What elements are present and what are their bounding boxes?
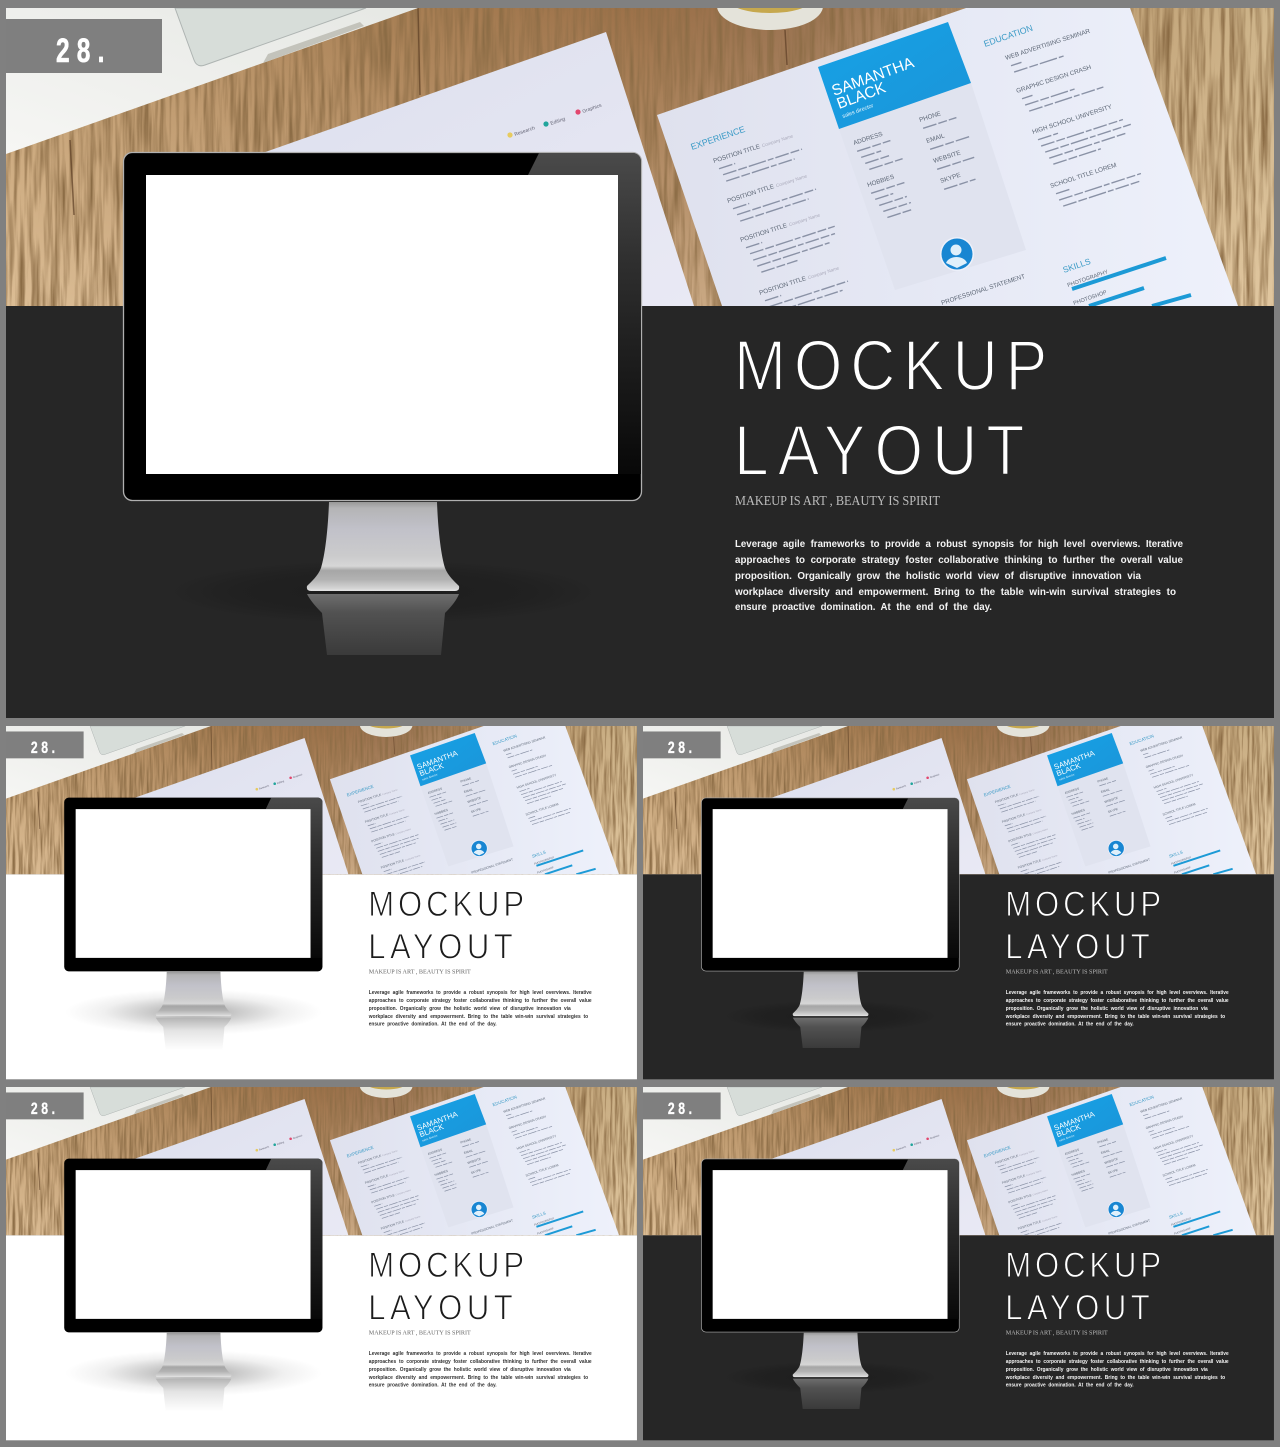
monitor reflection <box>307 594 459 655</box>
name banner: SAMANTHA <box>830 54 917 100</box>
body text: ensure proactive domination. At the end of the day. <box>1006 1383 1134 1389</box>
body text: approaches to corporate strategy foster collaborative thinking to further the overall value <box>369 998 592 1004</box>
name banner: sales director <box>842 103 875 120</box>
monitor reflection <box>793 1379 868 1409</box>
monitor reflection <box>156 1379 231 1411</box>
center column <box>839 83 1026 290</box>
body text: proposition. Organically grow the holistic world view of disruptive innovation via <box>1006 1006 1208 1012</box>
contact column: PHONE <box>918 110 942 124</box>
education column: GRAPHIC DESIGN CRASH <box>1015 64 1093 95</box>
title: MOCKUP <box>734 326 1047 406</box>
body text: Leverage agile frameworks to provide a robust synopsis for high level overviews. Iterative <box>369 1351 592 1357</box>
title: LAYOUT <box>368 928 513 967</box>
badge: slide number <box>643 1092 721 1119</box>
education column: SCHOOL TITLE LOREM <box>1049 162 1118 190</box>
experience column: Company Name <box>807 265 840 280</box>
panel: small light slide, bottom left <box>6 1074 637 1440</box>
skills bars <box>1061 256 1191 307</box>
badge: slide number: 28. <box>56 32 112 70</box>
laptop <box>6 8 418 154</box>
dark lower background <box>643 1235 1274 1440</box>
body text <box>368 1351 592 1389</box>
experience column: Company Name <box>775 173 808 188</box>
panel: large dark slide <box>6 0 1274 718</box>
monitor frame and screen <box>124 152 642 500</box>
contact column: HOBBIES <box>866 174 895 189</box>
back sheet of paper with legend: Graphics <box>582 103 603 115</box>
body text <box>734 538 1183 613</box>
body text <box>1005 1351 1229 1389</box>
body text: proposition. Organically grow the holistic world view of disruptive innovation via <box>369 1006 571 1012</box>
experience column: POSITION TITLE <box>758 275 807 297</box>
monitor stand <box>793 972 868 1016</box>
body text: ensure proactive domination. At the end of the day. <box>1006 1022 1134 1028</box>
body text: ensure proactive domination. At the end of the day. <box>369 1022 497 1028</box>
title <box>734 326 1047 491</box>
name banner <box>818 22 971 129</box>
badge: slide number <box>6 19 162 73</box>
badge: slide number <box>6 731 84 758</box>
education column: WEB ADVERTISING SEMINAR <box>1004 28 1091 62</box>
body text: approaches to corporate strategy foster collaborative thinking to further the overall value <box>369 1359 592 1365</box>
body text <box>1005 990 1229 1028</box>
monitor stand <box>307 502 459 591</box>
body text: workplace diversity and empowerment. Bring to the table win-win survival strategies to <box>734 586 1176 598</box>
body text <box>368 990 592 1028</box>
contact column: SKYPE <box>939 172 962 185</box>
body text: ensure proactive domination. At the end of the day. <box>369 1383 497 1389</box>
education column: EDUCATION <box>982 23 1034 49</box>
subtitle: MAKEUP IS ART , BEAUTY IS SPIRIT <box>369 1329 471 1336</box>
body text: ensure proactive domination. At the end of the day. <box>735 601 992 613</box>
photo: desk with laptop, coffee and resume <box>6 0 1274 315</box>
experience column: Company Name <box>761 133 794 148</box>
title: LAYOUT <box>734 411 1024 491</box>
body text: proposition. Organically grow the holistic world view of disruptive innovation via <box>735 570 1141 582</box>
experience column: Company Name <box>788 212 821 227</box>
title: MOCKUP <box>1005 1246 1161 1286</box>
photo: desk <box>643 713 1274 879</box>
monitor floor shadow <box>65 1350 322 1396</box>
title: MOCKUP <box>368 1246 524 1286</box>
monitor floor shadow <box>168 560 598 624</box>
back sheet of paper with legend <box>200 32 694 306</box>
body text: workplace diversity and empowerment. Bring to the table win-win survival strategies to <box>1005 1014 1225 1020</box>
title: LAYOUT <box>368 1289 513 1328</box>
photo: desk <box>6 1074 637 1240</box>
white lower background <box>6 874 637 1079</box>
title <box>1005 1246 1161 1328</box>
title: MOCKUP <box>1005 885 1161 925</box>
experience column <box>689 124 850 315</box>
monitor mockup <box>701 798 959 1048</box>
body text: Leverage agile frameworks to provide a robust synopsis for high level overviews. Iterative <box>735 538 1183 550</box>
body text: approaches to corporate strategy foster collaborative thinking to further the overall value <box>1006 1359 1229 1365</box>
resume sheet <box>657 8 1238 315</box>
profile statement: PROFESSIONAL STATEMENT <box>940 273 1026 307</box>
body text: Leverage agile frameworks to provide a robust synopsis for high level overviews. Iterative <box>1006 1351 1229 1357</box>
panel: small light slide, top left <box>6 713 637 1079</box>
contact column: ADDRESS <box>852 131 884 147</box>
experience column: POSITION TITLE <box>726 183 775 205</box>
dark lower background <box>6 306 1274 718</box>
body text: Leverage agile frameworks to provide a robust synopsis for high level overviews. Iterative <box>369 990 592 996</box>
subtitle: MAKEUP IS ART , BEAUTY IS SPIRIT <box>735 493 941 508</box>
body text: proposition. Organically grow the holistic world view of disruptive innovation via <box>369 1367 571 1373</box>
wooden desk <box>6 8 1274 306</box>
skills bars: SKILLS <box>1061 256 1092 275</box>
experience column: POSITION TITLE <box>739 222 788 244</box>
skills bars: PHOTOSHOP <box>1073 290 1108 307</box>
experience column: EXPERIENCE <box>689 124 746 152</box>
contact column: WEBSITE <box>932 149 962 165</box>
subtitle: MAKEUP IS ART , BEAUTY IS SPIRIT <box>1006 968 1108 975</box>
monitor floor shadow <box>724 1001 938 1033</box>
monitor mockup <box>64 1159 322 1411</box>
education column <box>982 23 1143 208</box>
body text: approaches to corporate strategy foster collaborative thinking to further the overall value <box>1006 998 1229 1004</box>
monitor stand <box>156 1333 231 1377</box>
monitor stand <box>156 972 231 1016</box>
title: LAYOUT <box>1005 1289 1150 1328</box>
badge: slide number <box>643 731 721 758</box>
skills bars: PHOTOGRAPHY <box>1067 269 1109 289</box>
panel: small dark slide, bottom right <box>643 1074 1274 1440</box>
title: LAYOUT <box>1005 928 1150 967</box>
body text: workplace diversity and empowerment. Bring to the table win-win survival strategies to <box>368 1014 588 1020</box>
back sheet of paper with legend: Editing <box>550 116 566 127</box>
white lower background <box>6 1235 637 1440</box>
monitor reflection <box>156 1018 231 1050</box>
education column: HIGH SCHOOL UNIVERSITY <box>1031 103 1114 136</box>
monitor mockup <box>701 1159 959 1409</box>
dark lower background <box>643 874 1274 1079</box>
subtitle: MAKEUP IS ART , BEAUTY IS SPIRIT <box>369 968 471 975</box>
coffee cup <box>717 0 823 30</box>
body text: workplace diversity and empowerment. Bring to the table win-win survival strategies to <box>1005 1375 1225 1381</box>
title <box>368 1246 524 1328</box>
title <box>1005 885 1161 967</box>
back sheet of paper with legend: Research <box>514 125 536 138</box>
contact column: EMAIL <box>925 132 946 145</box>
avatar icon <box>940 237 974 271</box>
monitor frame and screen <box>64 798 322 971</box>
monitor stand <box>793 1333 868 1377</box>
photo: desk <box>6 713 637 879</box>
monitor floor shadow <box>724 1362 938 1394</box>
body text: proposition. Organically grow the holistic world view of disruptive innovation via <box>1006 1367 1208 1373</box>
monitor mockup <box>64 798 322 1050</box>
name banner: BLACK <box>835 79 889 113</box>
badge: slide number <box>6 1092 84 1119</box>
monitor floor shadow <box>65 989 322 1035</box>
monitor frame and screen <box>701 1159 959 1332</box>
subtitle: MAKEUP IS ART , BEAUTY IS SPIRIT <box>1006 1329 1108 1336</box>
panel: small dark slide, top right <box>643 713 1274 1079</box>
photo: desk <box>643 1074 1274 1240</box>
title: MOCKUP <box>368 885 524 925</box>
body text: workplace diversity and empowerment. Bring to the table win-win survival strategies to <box>368 1375 588 1381</box>
monitor frame and screen <box>701 798 959 971</box>
body text: approaches to corporate strategy foster collaborative thinking to further the overall value <box>735 554 1183 566</box>
monitor mockup <box>124 152 642 655</box>
body text: Leverage agile frameworks to provide a robust synopsis for high level overviews. Iterative <box>1006 990 1229 996</box>
contact column <box>852 106 975 220</box>
title <box>368 885 524 967</box>
monitor reflection <box>793 1018 868 1048</box>
monitor frame and screen <box>64 1159 322 1332</box>
experience column: POSITION TITLE <box>712 143 761 165</box>
